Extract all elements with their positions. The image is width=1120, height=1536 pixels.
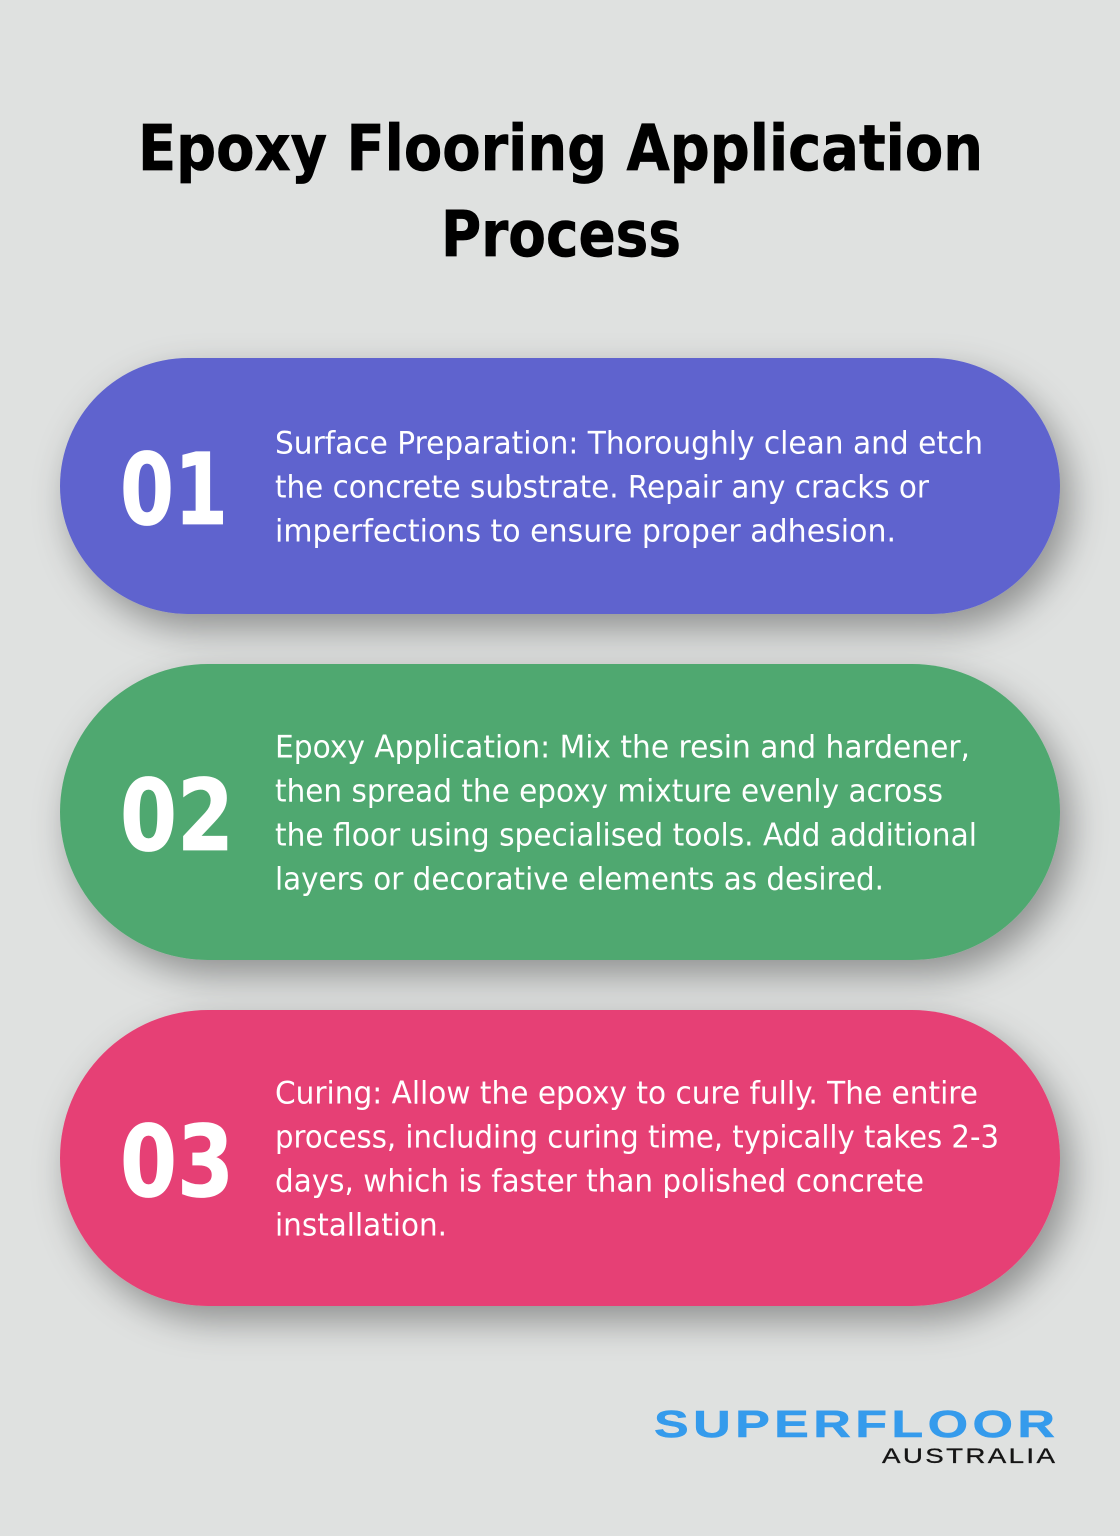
step 01 description: imperfections to ensure proper adhesion.: [275, 514, 896, 550]
step 03 description: Curing: Allow the epoxy to cure fully. The entire: [275, 1076, 978, 1112]
title: Epoxy Flooring Application: [138, 111, 983, 185]
panel: step 03 curing: [60, 1010, 1060, 1306]
panel: step 02 epoxy application: [60, 664, 1060, 960]
logo: Superfloor Australia: AUSTRALIA: [882, 1445, 1057, 1468]
title: Process: [441, 197, 681, 271]
title: [138, 111, 983, 271]
logo: Superfloor Australia: SUPERFLOOR: [654, 1403, 1059, 1445]
step 02 description: layers or decorative elements as desired.: [275, 862, 884, 898]
panel: step 01 surface preparation: [60, 358, 1060, 614]
step 02 description: [275, 730, 977, 898]
step 02 description: then spread the epoxy mixture evenly across: [275, 774, 943, 810]
logo: Superfloor Australia: [654, 1403, 1059, 1468]
step 01 description: the concrete substrate. Repair any cracks or: [275, 470, 929, 506]
step 03 description: installation.: [275, 1208, 447, 1244]
step 03 description: [275, 1076, 999, 1244]
step number 01: 01: [120, 433, 228, 548]
step number 02: 02: [120, 759, 234, 874]
step 02 description: Epoxy Application: Mix the resin and hardener,: [275, 730, 970, 766]
step 01 description: [275, 426, 983, 550]
step 03 description: process, including curing time, typically takes 2-3: [275, 1120, 999, 1156]
step 03 description: days, which is faster than polished concrete: [275, 1164, 924, 1200]
step 02 description: the floor using specialised tools. Add additional: [275, 818, 977, 854]
step number 03: 03: [120, 1105, 234, 1220]
step 01 description: Surface Preparation: Thoroughly clean and etch: [275, 426, 983, 462]
